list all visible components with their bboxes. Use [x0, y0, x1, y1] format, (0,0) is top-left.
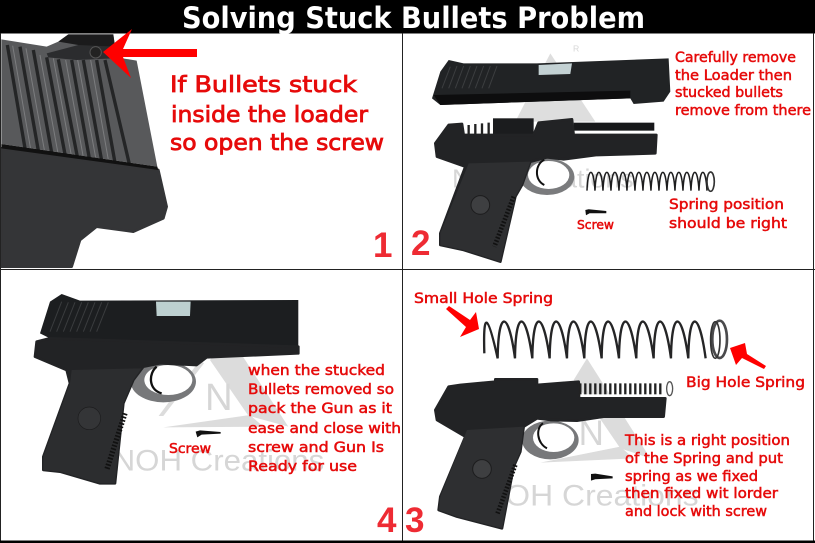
watermark: NOH Creations logo	[505, 358, 699, 512]
step number 4: 4	[377, 501, 397, 540]
panel: step 3 spring position	[405, 291, 805, 540]
instruction text: pack the gun: when the stucked	[248, 363, 385, 379]
instruction text: remove the loader: remove from there	[675, 103, 811, 119]
watermark: NOH Creations logo: N	[579, 414, 604, 453]
label: small hole spring: Small Hole Spring	[414, 291, 553, 307]
instruction text: right spring position: spring as we fixed	[625, 469, 758, 485]
watermark: NOH Creations logo: N	[205, 376, 233, 419]
arrow: small hole spring	[446, 306, 479, 337]
instruction text: remove the loader: stucked bullets	[675, 85, 783, 101]
instruction text: right spring position: This is a right position	[624, 433, 790, 449]
title bar	[0, 0, 815, 35]
panel: step 4 reassemble	[35, 294, 401, 540]
instruction text: pack the gun	[248, 363, 401, 475]
label: screw: Screw	[577, 218, 614, 232]
watermark: NOH Creations logo	[113, 337, 324, 478]
watermark: NOH Creations logo: OH Creations	[505, 479, 699, 512]
instruction text: remove the loader: the Loader then	[675, 68, 792, 84]
watermark: NOH Creations logo: R	[573, 44, 579, 54]
watermark: NOH Creations logo	[452, 44, 634, 193]
watermark: NOH Creations logo: NOH Creations	[452, 163, 634, 193]
instruction text: pack the gun: ease and close with	[248, 421, 401, 437]
watermark: NOH Creations logo: NOH Creations	[113, 445, 324, 478]
instruction text: right spring position	[624, 433, 790, 520]
instruction text: remove the loader	[675, 50, 811, 119]
photo: spring	[484, 321, 727, 358]
instruction text: pack the gun: Ready for use	[248, 459, 357, 475]
instruction text: right spring position: and lock with screw	[625, 504, 767, 520]
instruction text: right spring position: then fixed wit lorder	[625, 486, 778, 502]
panel: step 1 open the screw	[1, 29, 392, 267]
instruction text: step 1	[170, 73, 384, 156]
instruction text: spring position: should be right	[669, 216, 788, 232]
instruction text: step 1: inside the loader	[171, 103, 369, 128]
photo: disassembled pistol with slide, frame, spring and screw	[432, 58, 714, 262]
photo: close-up of pistol rear	[1, 34, 167, 267]
panel: step 2 remove the loader	[411, 44, 811, 263]
instruction text: step 1: If Bullets stuck	[170, 73, 357, 98]
instruction text: spring position	[669, 197, 788, 232]
arrow: points at screw	[103, 29, 197, 78]
label: screw: Screw	[169, 442, 211, 457]
title bar: Solving Stuck Bullets Problem	[182, 1, 645, 35]
instruction text: step 1: so open the screw	[170, 131, 384, 156]
instruction text: pack the gun: screw and Gun Is	[248, 440, 384, 456]
photo: pistol frame with spring fitted and screw	[435, 379, 673, 528]
instruction text: spring position: Spring position	[669, 197, 784, 213]
step number 1: 1	[373, 226, 392, 265]
photo: assembled pistol and screw	[35, 294, 298, 483]
step number 3: 3	[405, 501, 424, 540]
step number 2: 2	[411, 224, 430, 263]
instruction text: right spring position: of the Spring and put	[625, 451, 784, 467]
arrow: big hole spring	[730, 343, 766, 369]
instruction text: pack the gun: pack the Gun as it	[248, 401, 393, 417]
label: big hole spring: Big Hole Spring	[686, 375, 805, 391]
instruction text: remove the loader: Carefully remove	[675, 50, 796, 66]
instruction text: pack the gun: Bullets removed so	[248, 382, 394, 398]
